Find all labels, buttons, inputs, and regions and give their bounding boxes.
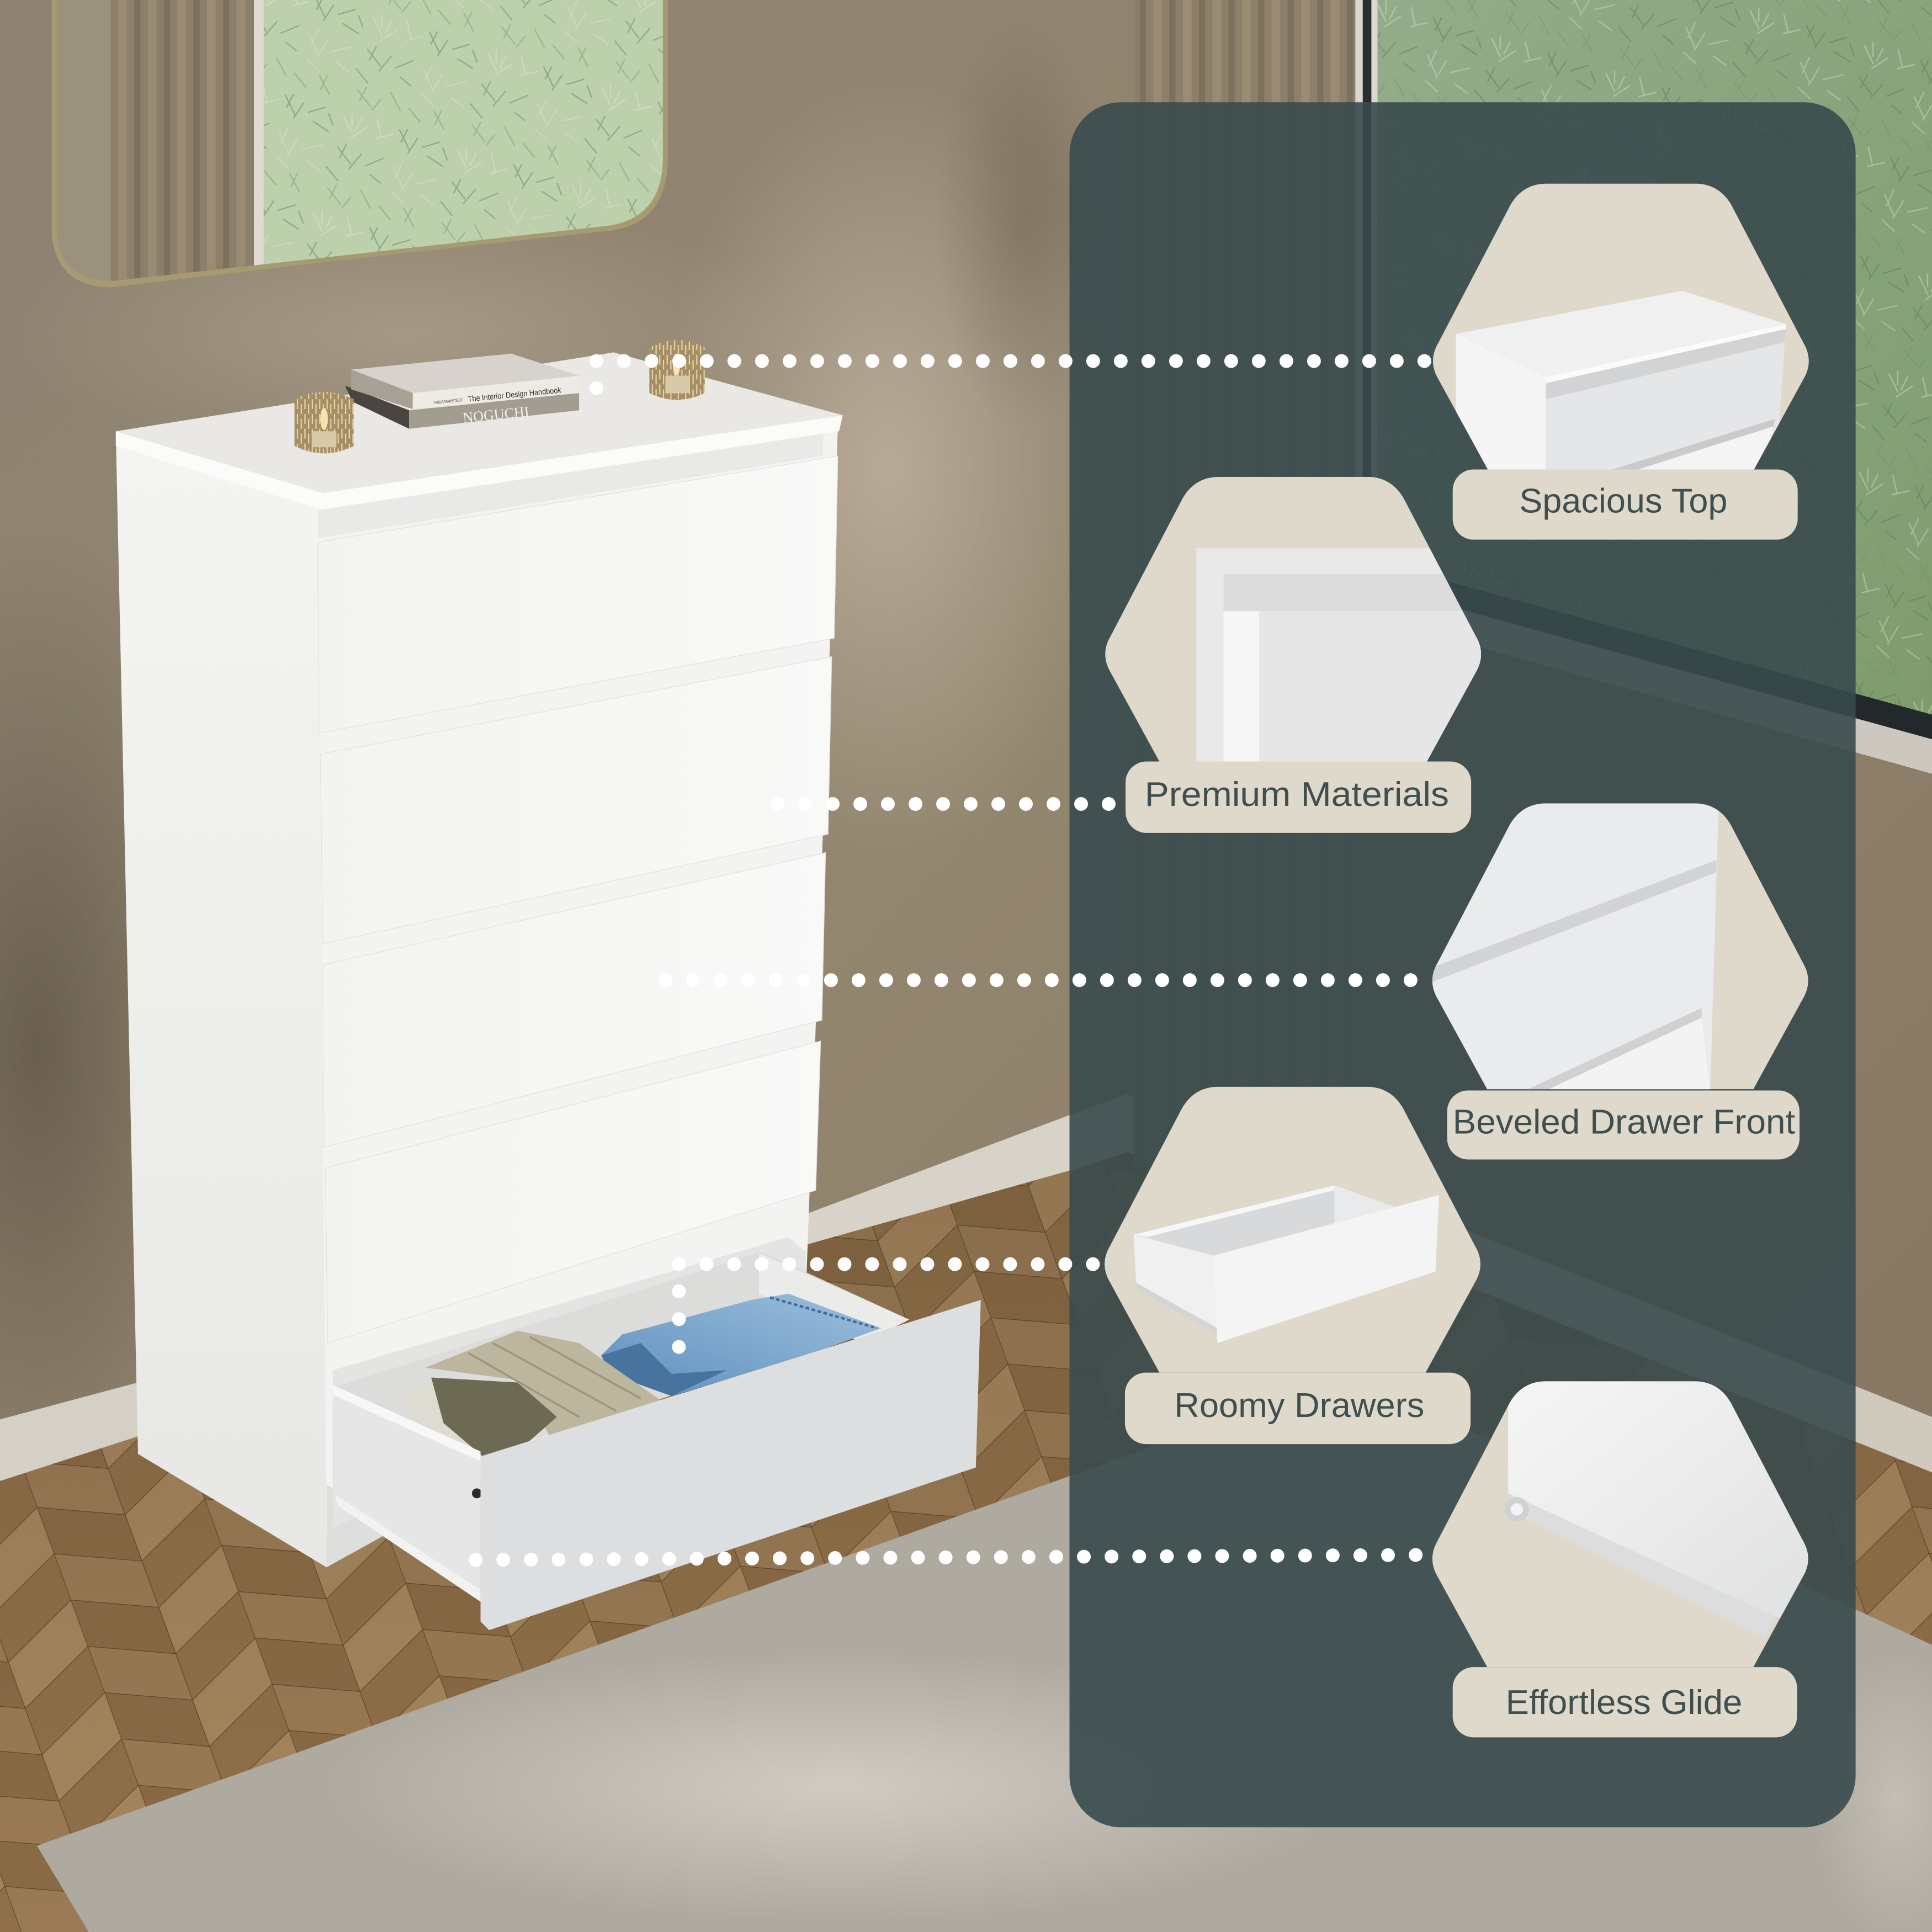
hexagon image: effortless glide bbox=[1411, 1374, 1830, 1670]
dotted connector: beveled drawer front bbox=[665, 977, 1414, 983]
drawer opening back bbox=[333, 1237, 806, 1528]
label: effortless glide: Effortless Glide bbox=[1506, 1683, 1742, 1722]
dotted connector: roomy drawers bbox=[679, 1264, 1094, 1348]
drawer rim bbox=[333, 1385, 481, 1461]
label: roomy drawers bbox=[1125, 1373, 1471, 1444]
label: spacious top bbox=[1453, 469, 1798, 540]
dotted connector: spacious top bbox=[590, 361, 1427, 395]
label: premium materials bbox=[1126, 761, 1471, 833]
cam lock bbox=[472, 1488, 482, 1498]
drawer front bbox=[481, 1300, 981, 1630]
book stack: FRIDA RAMSTEDT bbox=[433, 397, 463, 405]
dotted connector: effortless glide bbox=[476, 1555, 1417, 1560]
label: premium materials: Premium Materials bbox=[1145, 775, 1449, 814]
drawer interior bbox=[333, 1252, 909, 1456]
label: effortless glide bbox=[1453, 1667, 1797, 1737]
drawer 3 bbox=[323, 853, 826, 1147]
book titles: The Interior Design Handbook bbox=[468, 386, 562, 404]
window sill bbox=[1378, 562, 1932, 739]
dresser top bbox=[116, 352, 843, 493]
hexagon image: spacious top bbox=[1433, 183, 1809, 469]
left baseboard bbox=[0, 1382, 140, 1481]
hexagon image: beveled drawer front bbox=[1432, 803, 1808, 1090]
candle right bbox=[649, 340, 705, 400]
folded clothes bbox=[400, 1331, 662, 1458]
dresser side panel bbox=[116, 434, 327, 1567]
upper book bbox=[351, 354, 579, 393]
mirror bbox=[49, 0, 678, 296]
top edge bbox=[116, 415, 843, 510]
dotted connector: premium materials bbox=[777, 801, 1110, 807]
book stack: NOGUCHI bbox=[462, 403, 530, 426]
feature: beveled drawer front bbox=[1411, 796, 1830, 1159]
feature: roomy drawers bbox=[1083, 1079, 1502, 1444]
drawer side bbox=[333, 1387, 481, 1589]
feature: spacious top bbox=[1411, 176, 1830, 540]
label: spacious top: Spacious Top bbox=[1519, 482, 1727, 521]
dresser carcass front bbox=[318, 429, 838, 1567]
rug bbox=[37, 1376, 1932, 1932]
window bbox=[1353, 0, 1932, 774]
drawer rail bbox=[335, 1495, 481, 1602]
middle baseboard bbox=[807, 1094, 1127, 1244]
dresser toe kick bbox=[327, 1485, 493, 1577]
feature: effortless glide bbox=[1411, 1374, 1830, 1737]
curtain bbox=[1134, 0, 1355, 1244]
label: beveled drawer front: Beveled Drawer Front bbox=[1453, 1103, 1795, 1142]
interior side wall bbox=[759, 1253, 909, 1343]
book stack bbox=[345, 354, 579, 429]
floor bbox=[0, 1152, 1932, 1932]
recess under top bbox=[318, 434, 823, 538]
wall sunlight bbox=[0, 12, 1121, 1565]
feature: premium materials bbox=[1084, 469, 1507, 833]
hexagon image: premium materials bbox=[1105, 477, 1482, 762]
hexagon image: roomy drawers bbox=[1083, 1079, 1502, 1375]
label: beveled drawer front bbox=[1447, 1090, 1800, 1159]
drawer 4 bbox=[325, 1041, 821, 1343]
label: roomy drawers: Roomy Drawers bbox=[1174, 1386, 1424, 1425]
drawer 2 bbox=[320, 657, 832, 944]
open drawer bbox=[333, 1237, 981, 1630]
right baseboard bbox=[1127, 1094, 1932, 1472]
jeans bbox=[601, 1294, 881, 1396]
lower book bbox=[345, 386, 409, 429]
panel: features bbox=[1070, 102, 1856, 1827]
candle left bbox=[294, 392, 354, 453]
drawer 1 bbox=[318, 456, 838, 733]
dresser bbox=[116, 340, 981, 1630]
